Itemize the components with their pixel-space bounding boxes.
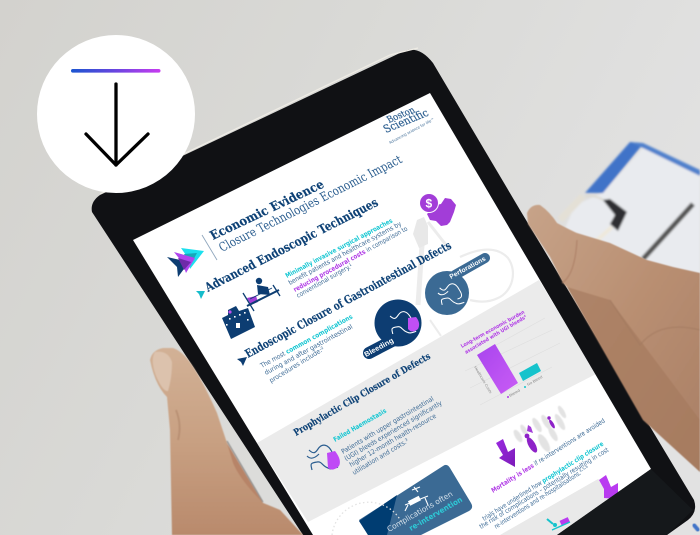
title: Closure Technologies Economic Impact bbox=[216, 152, 405, 255]
text: failed haemostasis body: (UGI) bleeds experienced significantly bbox=[343, 399, 444, 463]
text: randomised trials: the risk of complications – potentially resulting in cost bbox=[478, 446, 610, 531]
text: randomised trials: re-interventions and re-hospitalisations.⁴·⁵·⁶ bbox=[493, 464, 591, 531]
title: Economic Evidence bbox=[207, 177, 327, 243]
icon: people mortality bbox=[512, 405, 568, 454]
heading: prophylactic clip closure: Prophylactic Clip Closure of Defects bbox=[292, 351, 433, 439]
icon: bleeding bbox=[362, 300, 422, 359]
chart: long-term economic burden: associated with UGI bleeds⁴ bbox=[464, 314, 529, 356]
text: minimally invasive: conventional surgery.¹ bbox=[295, 262, 354, 300]
chart: long-term economic burden: Long-term economic burden bbox=[460, 309, 526, 350]
icon: bottom bed bbox=[547, 517, 570, 530]
chart: long-term economic burden: Healthcare Costs bbox=[473, 365, 493, 394]
chart: long-term economic burden bbox=[460, 309, 560, 405]
text: failed haemostasis body: higher 12-month health-resource bbox=[348, 412, 438, 469]
text: minimally invasive: reducing procedural costs in comparison to bbox=[292, 225, 409, 294]
subheading: failed haemostasis: Failed Haemostasis bbox=[332, 407, 388, 444]
card: complications: Complications often bbox=[385, 489, 455, 534]
text: failed haemostasis body: utilisation and costs.³ bbox=[351, 437, 410, 477]
heading: advanced endoscopic techniques bbox=[196, 195, 381, 299]
text: common complications: during and after gastrointestinal bbox=[263, 323, 354, 377]
chart: long-term economic burden: Bleed bbox=[508, 389, 521, 398]
text: failed haemostasis body: Patients with upper gastrointestinal bbox=[340, 395, 435, 456]
Boston Scientific logo: Scientific bbox=[381, 107, 431, 136]
download badge bbox=[37, 35, 195, 193]
left hand bbox=[150, 348, 303, 535]
text: common complications: The most common complications bbox=[258, 313, 354, 370]
Boston Scientific logo bbox=[383, 108, 434, 144]
download arrow bbox=[86, 84, 148, 165]
text: randomised trials: trials have underlined how prophylactic clip closure bbox=[481, 440, 605, 523]
icon: hospital bbox=[222, 306, 255, 339]
heading: advanced endoscopic techniques: Advanced Endoscopic Techniques bbox=[201, 195, 381, 295]
card: complications bbox=[359, 465, 472, 535]
blue object bottom right bbox=[693, 524, 699, 531]
heading: endoscopic closure bbox=[237, 238, 454, 366]
icon: piggy bank bbox=[419, 193, 456, 226]
endoscope watermark bbox=[413, 217, 513, 336]
band: prophylactic clip closure bbox=[257, 280, 596, 522]
tablet body bbox=[92, 48, 695, 535]
icon: bleeding: Bleeding bbox=[362, 336, 395, 359]
chart: long-term economic burden: No Bleed bbox=[526, 375, 543, 387]
clipboard bbox=[560, 142, 700, 290]
icon: piggy bank: $ bbox=[426, 196, 432, 210]
icon: perforations: Perforations bbox=[448, 256, 488, 281]
text: minimally invasive: benefit patients and healthcare systems by bbox=[287, 220, 403, 287]
card: complications: re-intervention bbox=[407, 495, 464, 533]
Boston Scientific logo: Boston bbox=[385, 105, 417, 126]
gradient line bbox=[71, 69, 160, 73]
text: common complications: procedures include:² bbox=[268, 345, 326, 385]
icon: down arrow purple bbox=[496, 439, 515, 467]
icon: perforations bbox=[425, 256, 488, 315]
heading: endoscopic closure: Endoscopic Closure of Gastrointestinal Defects bbox=[242, 238, 454, 361]
title bbox=[207, 152, 405, 255]
right hand bbox=[527, 205, 700, 472]
tablet screen bbox=[120, 85, 680, 535]
dashed circle bbox=[332, 502, 402, 535]
icon: patient in bed bbox=[243, 278, 280, 311]
logo bbox=[167, 248, 204, 277]
icon: stomach bleed bbox=[307, 445, 340, 470]
dark lower bezel bbox=[557, 469, 693, 535]
icon: bottom arrow bbox=[599, 475, 618, 499]
text: mortality: Mortality is less if re-interventions are avoided bbox=[490, 417, 606, 495]
Boston Scientific logo: Advancing science for life™ bbox=[388, 116, 436, 145]
text: minimally invasive: Minimally invasive surgical approaches bbox=[284, 217, 394, 280]
bottom grey band bbox=[500, 479, 625, 535]
